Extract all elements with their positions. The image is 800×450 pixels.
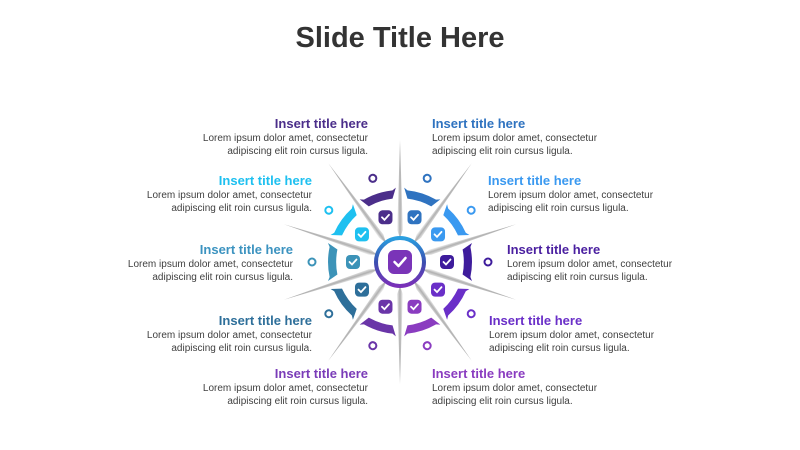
text: Lorem ipsum dolor amet, consectetur [489,330,654,341]
text block: right 3 [507,242,672,283]
text: Lorem ipsum dolor amet, consectetur [507,259,672,270]
text: Insert title here [219,173,312,188]
check icons [346,210,454,314]
center hub [376,238,424,286]
text: Lorem ipsum dolor amet, consectetur [203,383,368,394]
text: adipiscing elit roin cursus ligula. [227,396,368,407]
text: Lorem ipsum dolor amet, consectetur [432,133,597,144]
text: adipiscing elit roin cursus ligula. [489,343,630,354]
text: adipiscing elit roin cursus ligula. [488,203,629,214]
spikes [283,140,517,384]
title: Slide Title Here [296,22,504,54]
text: adipiscing elit roin cursus ligula. [171,203,312,214]
text: Lorem ipsum dolor amet, consectetur [128,259,293,270]
text: Insert title here [432,366,525,381]
text: Lorem ipsum dolor amet, consectetur [203,133,368,144]
text: Lorem ipsum dolor amet, consectetur [432,383,597,394]
text block: right 5 [432,366,597,407]
text: adipiscing elit roin cursus ligula. [227,146,368,157]
text: Insert title here [275,366,368,381]
text: Insert title here [200,242,293,257]
text: Insert title here [488,173,581,188]
text: adipiscing elit roin cursus ligula. [171,343,312,354]
wheel diagram [285,142,515,382]
text block: left 1 [203,116,368,157]
text: Lorem ipsum dolor amet, consectetur [488,190,653,201]
outer dots [308,174,492,350]
text: Insert title here [432,116,525,131]
text: adipiscing elit roin cursus ligula. [432,146,573,157]
text: adipiscing elit roin cursus ligula. [507,272,648,283]
text block: right 4 [489,313,654,354]
text block: left 3 [128,242,293,283]
text block: left 4 [147,313,312,354]
text block: right 1 [432,116,597,157]
text block: left 2 [147,173,312,214]
text: Insert title here [219,313,312,328]
text: adipiscing elit roin cursus ligula. [432,396,573,407]
text: adipiscing elit roin cursus ligula. [152,272,293,283]
text: Insert title here [275,116,368,131]
text block: right 2 [488,173,653,214]
text: Insert title here [489,313,582,328]
text: Insert title here [507,242,600,257]
ring segments [328,188,472,336]
text block: left 5 [203,366,368,407]
text: Lorem ipsum dolor amet, consectetur [147,330,312,341]
text: Lorem ipsum dolor amet, consectetur [147,190,312,201]
